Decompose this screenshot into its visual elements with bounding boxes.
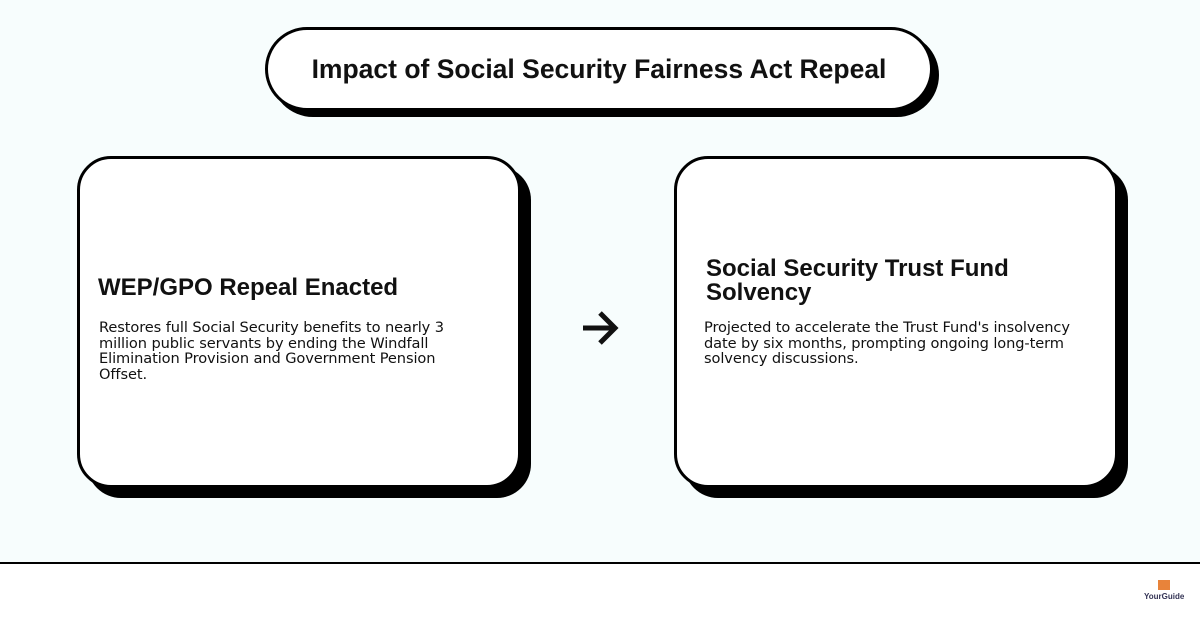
- title: [265, 27, 933, 111]
- heading: trust fund: Social Security Trust Fund: [706, 255, 1009, 282]
- title: Impact of Social Security Fairness Act Repeal: [312, 54, 886, 84]
- panel: WEP/GPO repeal: [77, 156, 521, 488]
- text: WEP/GPO description: Elimination Provision and Government Pension: [99, 350, 435, 367]
- text: WEP/GPO description: Offset.: [99, 366, 147, 382]
- panel: trust fund solvency: [674, 156, 1118, 488]
- text: trust fund description: Projected to accelerate the Trust Fund's insolvency: [704, 319, 1070, 336]
- heading: WEP/GPO: WEP/GPO Repeal Enacted: [98, 274, 398, 301]
- text: trust fund description: [704, 319, 1070, 367]
- text: WEP/GPO description: [99, 319, 444, 382]
- text: WEP/GPO description: Restores full Social Security benefits to nearly 3: [99, 319, 444, 336]
- text: trust fund description: date by six months, prompting ongoing long-term: [704, 334, 1064, 352]
- icon: logo: [1144, 580, 1184, 601]
- icon: logo: YourGuide: [1144, 592, 1184, 601]
- heading: trust fund: Solvency: [706, 279, 811, 306]
- heading: trust fund: [706, 255, 1009, 306]
- text: WEP/GPO description: million public servants by ending the Windfall: [99, 334, 428, 352]
- text: trust fund description: solvency discussions.: [704, 350, 859, 367]
- arrow: [583, 311, 618, 345]
